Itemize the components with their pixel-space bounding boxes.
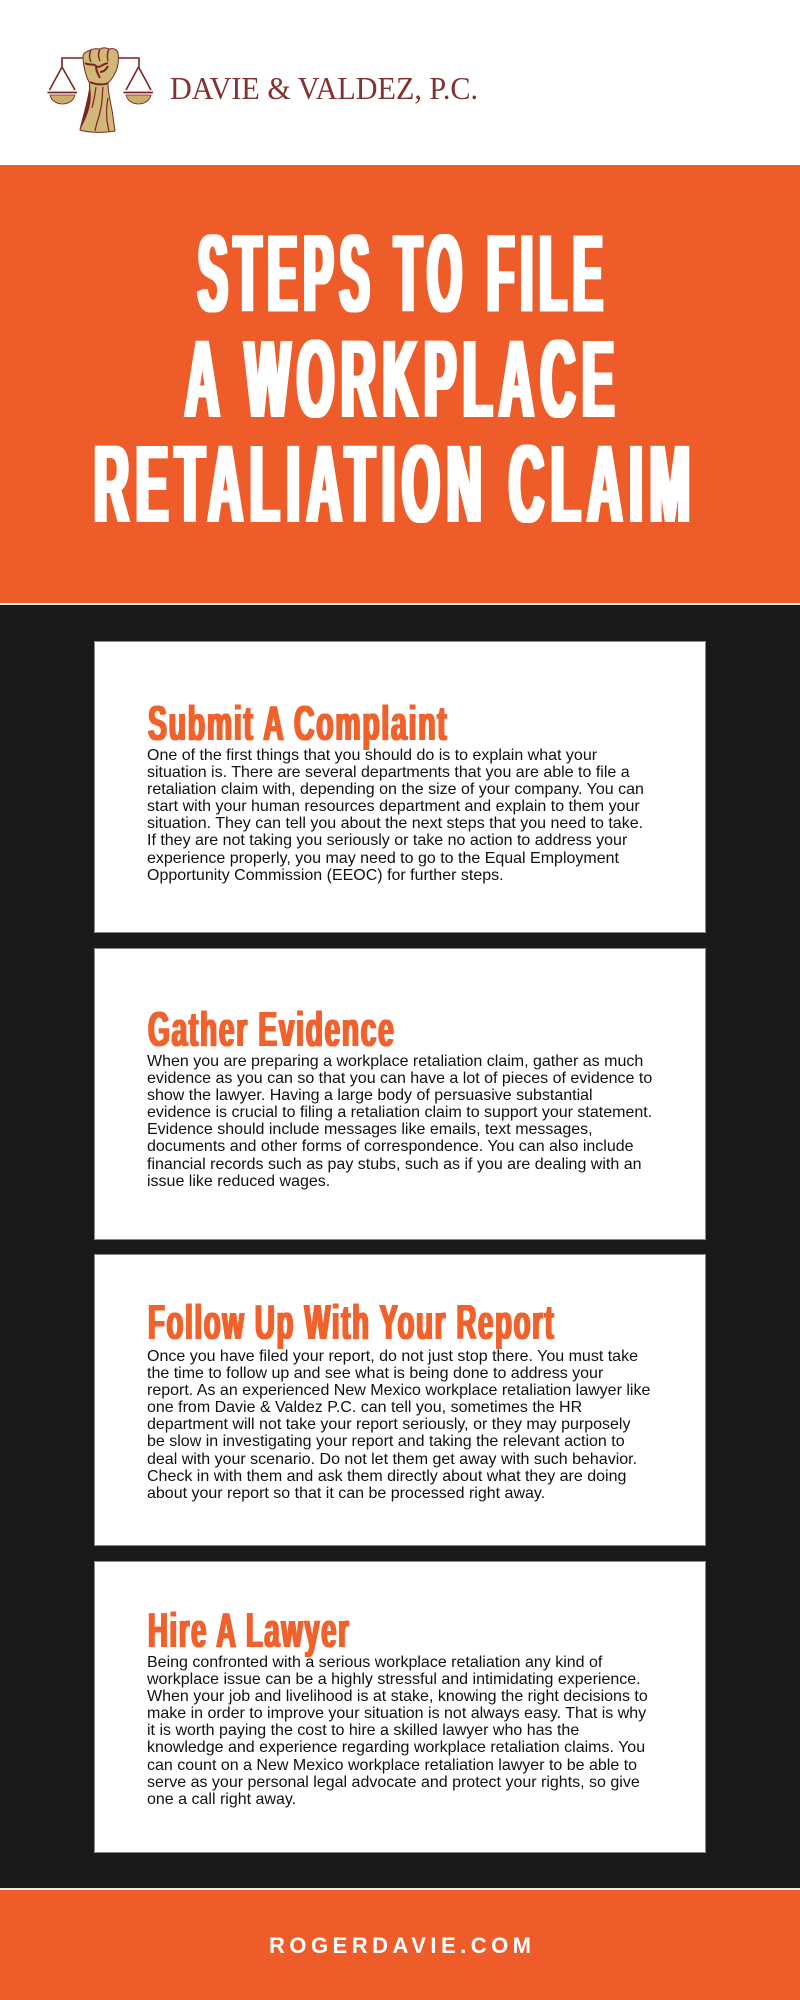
text: follow up with your report: report. As an experienced New Mexico workplace retaliation lawyer like: [147, 1382, 650, 1399]
text: follow up with your report: about your report so that it can be processed right away.: [147, 1485, 545, 1502]
heading: gather evidence: Gather Evidence: [148, 1003, 396, 1057]
text: hire a lawyer: make in order to improve your situation is not always easy. That is why: [147, 1705, 646, 1722]
title band: [0, 165, 800, 603]
text: hire a lawyer: When your job and livelihood is at stake, knowing the right decisions to: [147, 1688, 648, 1705]
panel: submit a complaint: [94, 641, 706, 933]
text: gather evidence: issue like reduced wages.: [147, 1173, 330, 1190]
header: logo band: [0, 0, 800, 165]
text: submit a complaint: [147, 747, 644, 884]
text: submit a complaint: If they are not taking you seriously or take no action to address your: [147, 832, 627, 849]
footer band: [0, 1890, 800, 2000]
text: follow up with your report: Check in with them and ask them directly about what they are doing: [147, 1468, 626, 1485]
text: hire a lawyer: Being confronted with a serious workplace retaliation any kind of: [147, 1654, 602, 1671]
text: gather evidence: evidence as you can so that you can have a lot of pieces of evidence to: [147, 1070, 652, 1087]
icon: scales of justice: [48, 58, 153, 104]
text: follow up with your report: deal with your scenario. Do not let them get away with such behavior.: [147, 1451, 637, 1468]
text: gather evidence: show the lawyer. Having a large body of persuasive substantial: [147, 1087, 593, 1104]
text: gather evidence: Evidence should include messages like emails, text messages,: [147, 1121, 593, 1138]
text: submit a complaint: retaliation claim with, depending on the size of your company. You can: [147, 781, 644, 798]
text: submit a complaint: situation is. There are several departments that you are able to file a: [147, 764, 630, 781]
text: submit a complaint: start with your human resources department and explain to them your: [147, 798, 640, 815]
text: follow up with your report: [147, 1348, 650, 1502]
firm name: DAVIE & VALDEZ, P.C.: [170, 70, 478, 106]
heading: submit a complaint: Submit A Complaint: [148, 697, 448, 751]
text: follow up with your report: Once you have filed your report, do not just stop there. You must take: [147, 1348, 638, 1365]
text: gather evidence: financial records such as pay stubs, such as if you are dealing with an: [147, 1156, 642, 1173]
logo: [48, 47, 478, 133]
panel: gather evidence: [94, 948, 706, 1240]
text: follow up with your report: department will not take your report seriously, or they may purposely: [147, 1416, 630, 1433]
panel: follow up with your report: [94, 1254, 706, 1546]
text: submit a complaint: One of the first things that you should do is to explain what your: [147, 747, 597, 764]
text: submit a complaint: Opportunity Commission (EEOC) for further steps.: [147, 867, 504, 884]
text: hire a lawyer: one a call right away.: [147, 1791, 296, 1808]
text: hire a lawyer: can count on a New Mexico workplace retaliation lawyer to be able to: [147, 1757, 637, 1774]
text: hire a lawyer: serve as your personal legal advocate and protect your rights, so give: [147, 1774, 640, 1791]
icon: raised fist: [80, 48, 118, 132]
text: submit a complaint: experience properly, you may need to go to the Equal Employment: [147, 850, 619, 867]
text: follow up with your report: be slow in investigating your report and taking the relevant action to: [147, 1433, 625, 1450]
text: hire a lawyer: workplace issue can be a highly stressful and intimidating experience.: [147, 1671, 641, 1688]
text: follow up with your report: the time to follow up and see what is being done to address your: [147, 1365, 603, 1382]
text: submit a complaint: situation. They can tell you about the next steps that you need to take.: [147, 815, 643, 832]
panel: hire a lawyer: [94, 1561, 706, 1853]
text: gather evidence: [147, 1053, 652, 1190]
text: hire a lawyer: knowledge and experience regarding workplace retaliation claims. You: [147, 1739, 645, 1756]
title: [94, 212, 697, 546]
text: follow up with your report: one from Davie & Valdez P.C. can tell you, sometimes the HR: [147, 1399, 582, 1416]
text: gather evidence: evidence is crucial to filing a retaliation claim to support your statement.: [147, 1104, 652, 1121]
text: hire a lawyer: [147, 1654, 648, 1808]
heading: hire a lawyer: Hire A Lawyer: [148, 1604, 350, 1658]
footer url: ROGERDAVIE.COM: [269, 1933, 531, 1958]
text: gather evidence: documents and other forms of correspondence. You can also include: [147, 1138, 634, 1155]
text: gather evidence: When you are preparing a workplace retaliation claim, gather as much: [147, 1053, 643, 1070]
text: hire a lawyer: it is worth paying the cost to hire a skilled lawyer who has the: [147, 1722, 579, 1739]
